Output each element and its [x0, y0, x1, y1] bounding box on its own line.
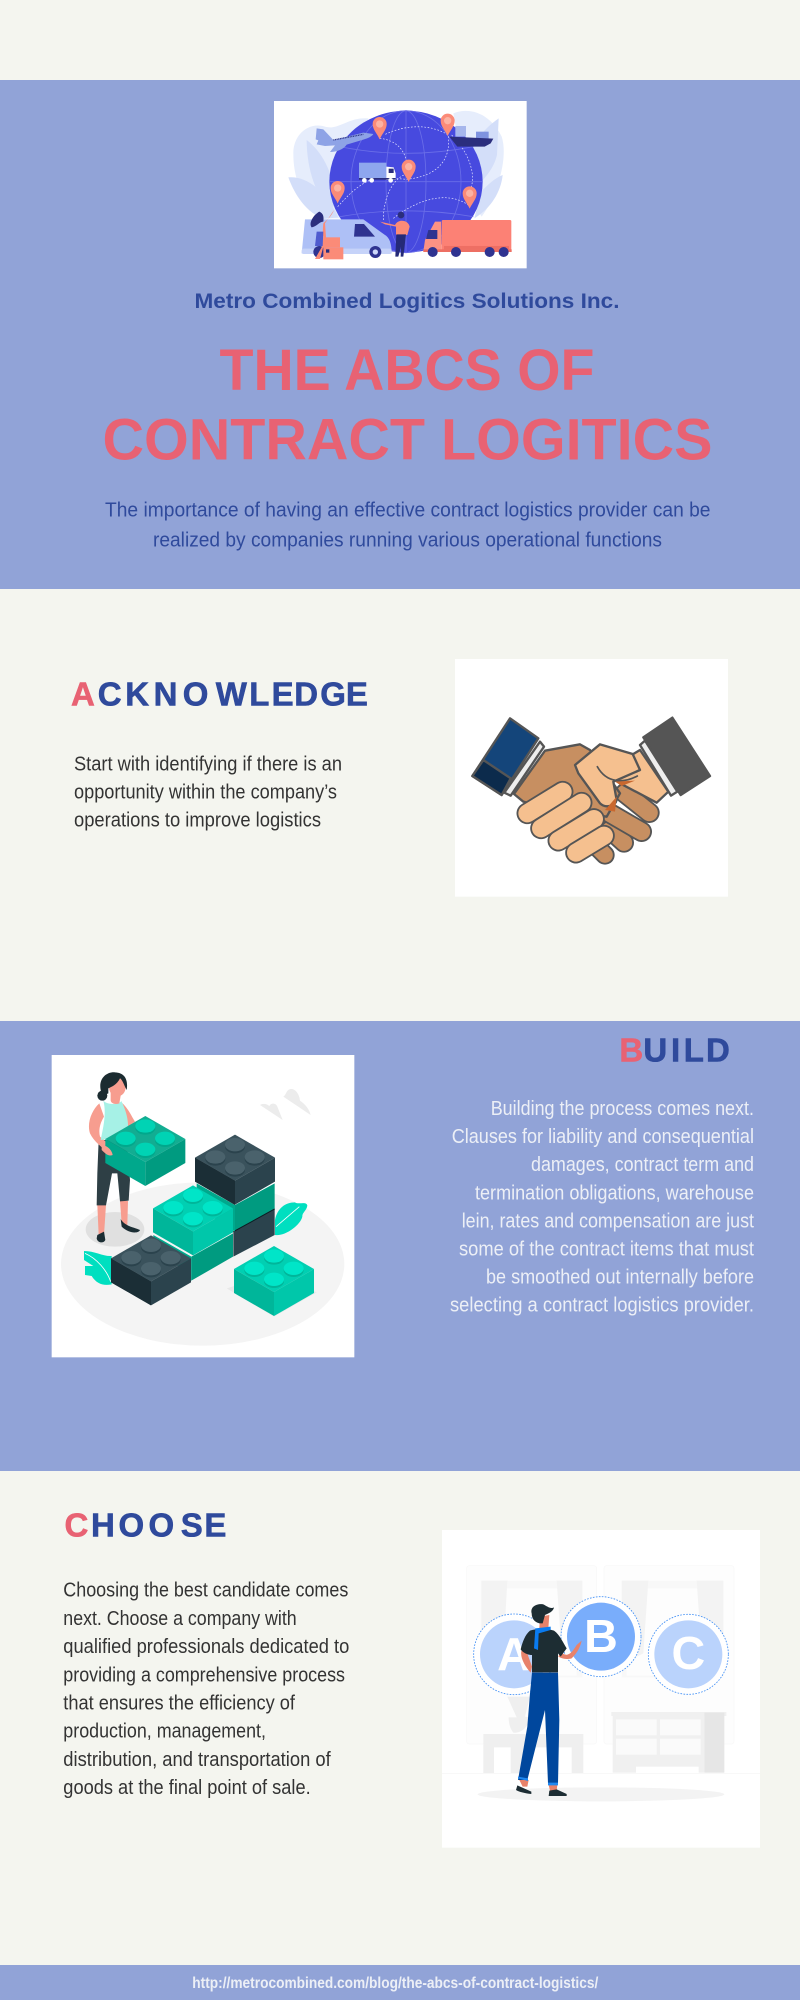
text: acknowledge body	[74, 754, 342, 832]
heading: acknowledge: CKNOWLEDGE	[98, 676, 368, 712]
illustration: man choosing ABC	[442, 1530, 760, 1848]
panel: hero band	[0, 80, 800, 589]
badge: B	[561, 1597, 641, 1677]
icon: ship	[449, 126, 493, 147]
back fingers of the left hand	[597, 793, 649, 855]
text: choose body: distribution, and transportation of	[63, 1749, 331, 1771]
text: choose body: Choosing the best candidate comes	[63, 1580, 348, 1602]
panel: choose	[63, 1506, 349, 1799]
text: build body: damages, contract term and	[531, 1154, 754, 1176]
text: choose body: providing a comprehensive process	[63, 1664, 345, 1686]
icon: van	[302, 219, 392, 258]
text: acknowledge body: Start with identifying if there is an	[74, 754, 342, 776]
text: choose body: next. Choose a company with	[63, 1608, 297, 1630]
icon: red truck	[423, 220, 512, 257]
panel: build band	[0, 1021, 800, 1471]
background room	[442, 1566, 760, 1773]
text: introduction	[105, 498, 710, 552]
text: build body: lein, rates and compensation are just	[462, 1210, 754, 1232]
text: footer url: http://metrocombined.com/blog/the-abcs-of-contract-logistics/	[192, 1975, 599, 1992]
illustration: global logistics	[274, 101, 527, 268]
badge: C	[648, 1614, 728, 1694]
text: build body: be smoothed out internally before	[486, 1267, 754, 1289]
text: build body: some of the contract items that must	[459, 1238, 754, 1260]
text: introduction: realized by companies running various operational functions	[153, 528, 662, 552]
heading: choose: HOOSE	[91, 1506, 226, 1544]
text: build body: Clauses for liability and consequential	[452, 1126, 754, 1148]
leaves	[84, 1202, 307, 1285]
panel: footer band	[0, 1965, 800, 2000]
icon: man	[380, 212, 410, 257]
front fingers of the left hand	[527, 792, 604, 853]
text: choose body: goods at the final point of sale.	[63, 1777, 311, 1799]
icon: woman and boxes	[311, 210, 343, 259]
panel: acknowledge	[71, 676, 368, 832]
text: choose body	[63, 1580, 349, 1799]
heading: choose: C	[64, 1506, 88, 1544]
title: THE ABCS OF	[220, 338, 594, 403]
clouds	[260, 1089, 311, 1120]
text: build body: selecting a contract logistics provider.	[450, 1295, 754, 1317]
text: build body: Building the process comes next.	[491, 1098, 754, 1120]
text: build body: termination obligations, warehouse	[475, 1182, 754, 1204]
brick: carried	[105, 1116, 185, 1186]
text: introduction: The importance of having an effective contract logistics provider can be	[105, 498, 710, 522]
icon: woman	[89, 1072, 140, 1242]
heading: build: B	[619, 1032, 643, 1068]
badge: A	[474, 1614, 554, 1695]
heading: acknowledge: A	[71, 676, 95, 712]
badge: C: C	[671, 1627, 705, 1679]
text: acknowledge body: opportunity within the company’s	[74, 782, 337, 804]
text: acknowledge body: operations to improve logistics	[74, 810, 321, 832]
bricks: back stack	[111, 1135, 275, 1305]
title: CONTRACT LOGITICS	[102, 408, 712, 472]
text: company name: Metro Combined Logitics Solutions Inc.	[194, 289, 620, 313]
brick: loose front	[227, 1246, 317, 1317]
text: choose body: that ensures the efficiency of	[63, 1692, 295, 1714]
icon: centre truck	[359, 163, 396, 183]
illustration: handshake	[455, 659, 728, 897]
icon: man	[516, 1604, 582, 1796]
title	[102, 338, 712, 472]
text: build body	[450, 1098, 754, 1317]
text: choose body: production, management,	[63, 1721, 266, 1743]
heading: build: UILD	[643, 1032, 730, 1068]
badge: A: A	[497, 1628, 531, 1680]
badge: B: B	[584, 1610, 618, 1662]
icon: plane	[316, 128, 373, 152]
text: choose body: qualified professionals dedicated to	[63, 1636, 349, 1658]
panel: build	[450, 1032, 754, 1317]
illustration: woman stacking bricks	[52, 1055, 354, 1357]
